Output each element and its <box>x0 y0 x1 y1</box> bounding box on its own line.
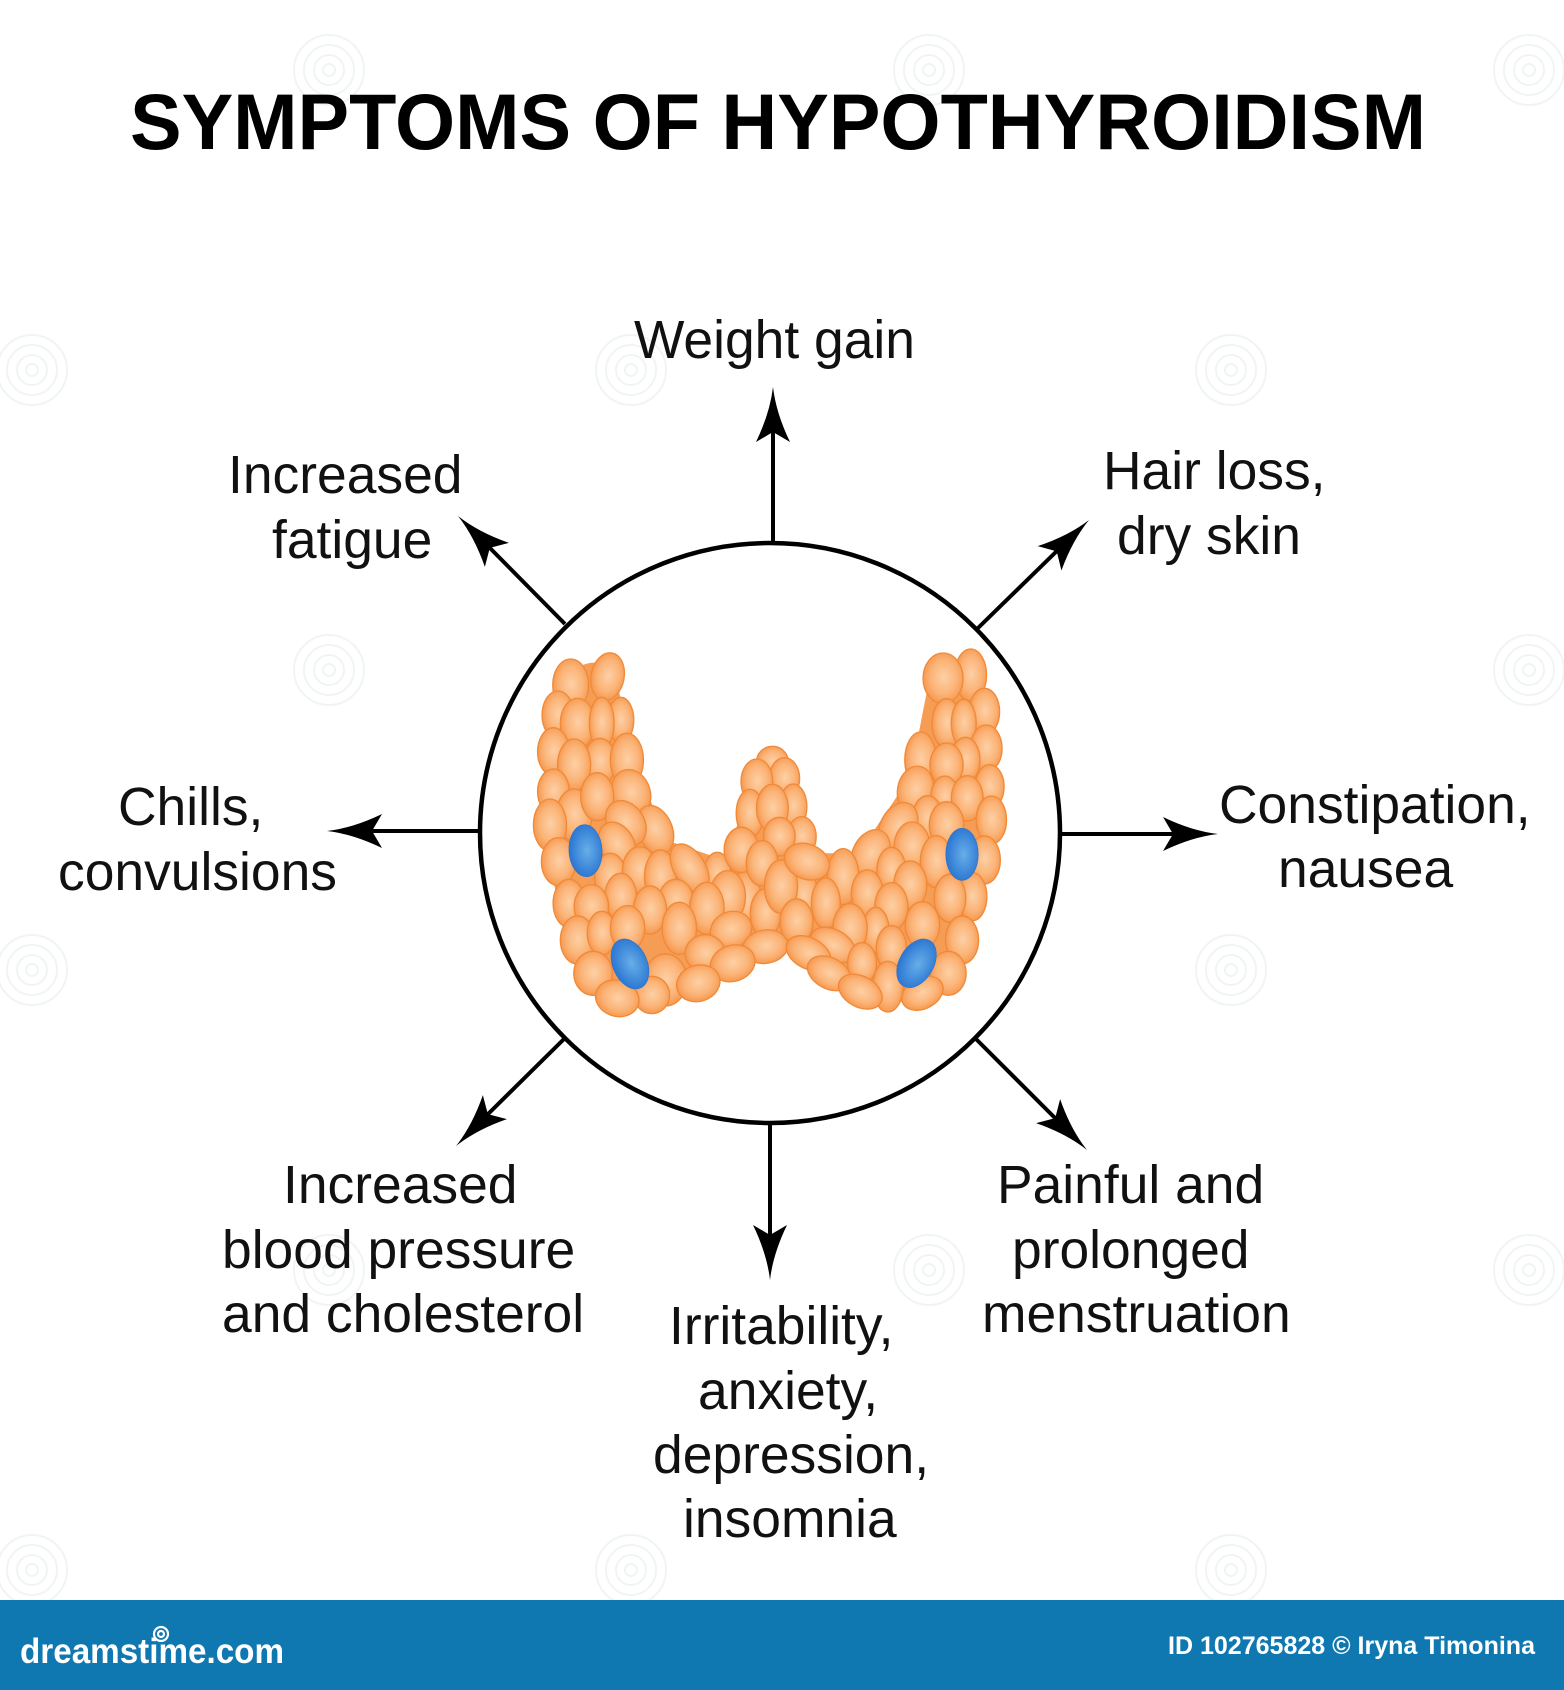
blue nodule upper right <box>946 828 978 880</box>
label: constipation, nausea <box>1219 776 1531 899</box>
label: increased fatigue: fatigue <box>272 511 432 570</box>
blue nodule upper left <box>568 824 603 877</box>
arrow: hair loss <box>978 508 1101 628</box>
arrow: constipation <box>1060 817 1218 851</box>
title: SYMPTOMS OF HYPOTHYROIDISM <box>130 77 1426 166</box>
arrow: menstruation <box>976 1039 1099 1162</box>
blue nodule lower right <box>889 933 944 994</box>
label: irritability, anxiety, depression, insomnia: anxiety, <box>698 1362 878 1421</box>
label: painful and prolonged menstruation: menstruation <box>982 1285 1291 1344</box>
isthmus follicles <box>724 746 819 922</box>
label: painful and prolonged menstruation: Painful and <box>997 1156 1264 1215</box>
footer logo text: dreamstime.com <box>20 1632 284 1671</box>
arrow: irritability <box>753 1124 787 1280</box>
label: increased blood pressure and cholesterol: blood pressure <box>222 1221 575 1280</box>
right lobe follicles <box>778 649 1007 1017</box>
label: increased fatigue: Increased <box>228 446 462 505</box>
label: chills, convulsions: Chills, <box>118 778 263 837</box>
label: increased blood pressure and cholesterol: and cholesterol <box>222 1285 584 1344</box>
blue nodule lower left <box>604 934 656 994</box>
label: chills, convulsions <box>58 778 337 902</box>
label: chills, convulsions: convulsions <box>58 843 337 902</box>
label: painful and prolonged menstruation: prolonged <box>1012 1221 1250 1280</box>
footer bar <box>0 1600 1564 1690</box>
label: hair loss, dry skin <box>1103 442 1326 566</box>
label: irritability, anxiety, depression, insomnia: depression, <box>653 1426 929 1485</box>
central circle <box>480 543 1060 1123</box>
footer credit: ID 102765828 © Iryna Timonina <box>1168 1632 1536 1660</box>
label: constipation, nausea: nausea <box>1278 840 1453 899</box>
label: painful and prolonged menstruation <box>982 1156 1291 1344</box>
label: increased blood pressure and cholesterol <box>222 1156 584 1344</box>
thyroid base shape <box>541 662 1000 1010</box>
arrow: weight gain <box>756 387 790 542</box>
label: hair loss, dry skin: Hair loss, <box>1103 442 1326 501</box>
arrow: fatigue <box>446 504 565 624</box>
arrow: chills <box>327 814 479 848</box>
left lobe follicles <box>533 650 791 1023</box>
label: hair loss, dry skin: dry skin <box>1117 507 1301 566</box>
label: increased blood pressure and cholesterol: Increased <box>283 1156 517 1215</box>
label: irritability, anxiety, depression, insomnia: Irritability, <box>669 1297 893 1356</box>
arrow: blood pressure <box>444 1039 564 1158</box>
label: constipation, nausea: Constipation, <box>1219 776 1531 835</box>
label: irritability, anxiety, depression, insomnia: insomnia <box>683 1490 897 1549</box>
footer logo spiral icon <box>154 1627 168 1641</box>
label: increased fatigue <box>228 446 462 570</box>
label: irritability, anxiety, depression, insomnia <box>653 1297 929 1549</box>
label: weight gain: Weight gain <box>634 311 915 370</box>
thyroid gland illustration <box>533 649 1007 1023</box>
